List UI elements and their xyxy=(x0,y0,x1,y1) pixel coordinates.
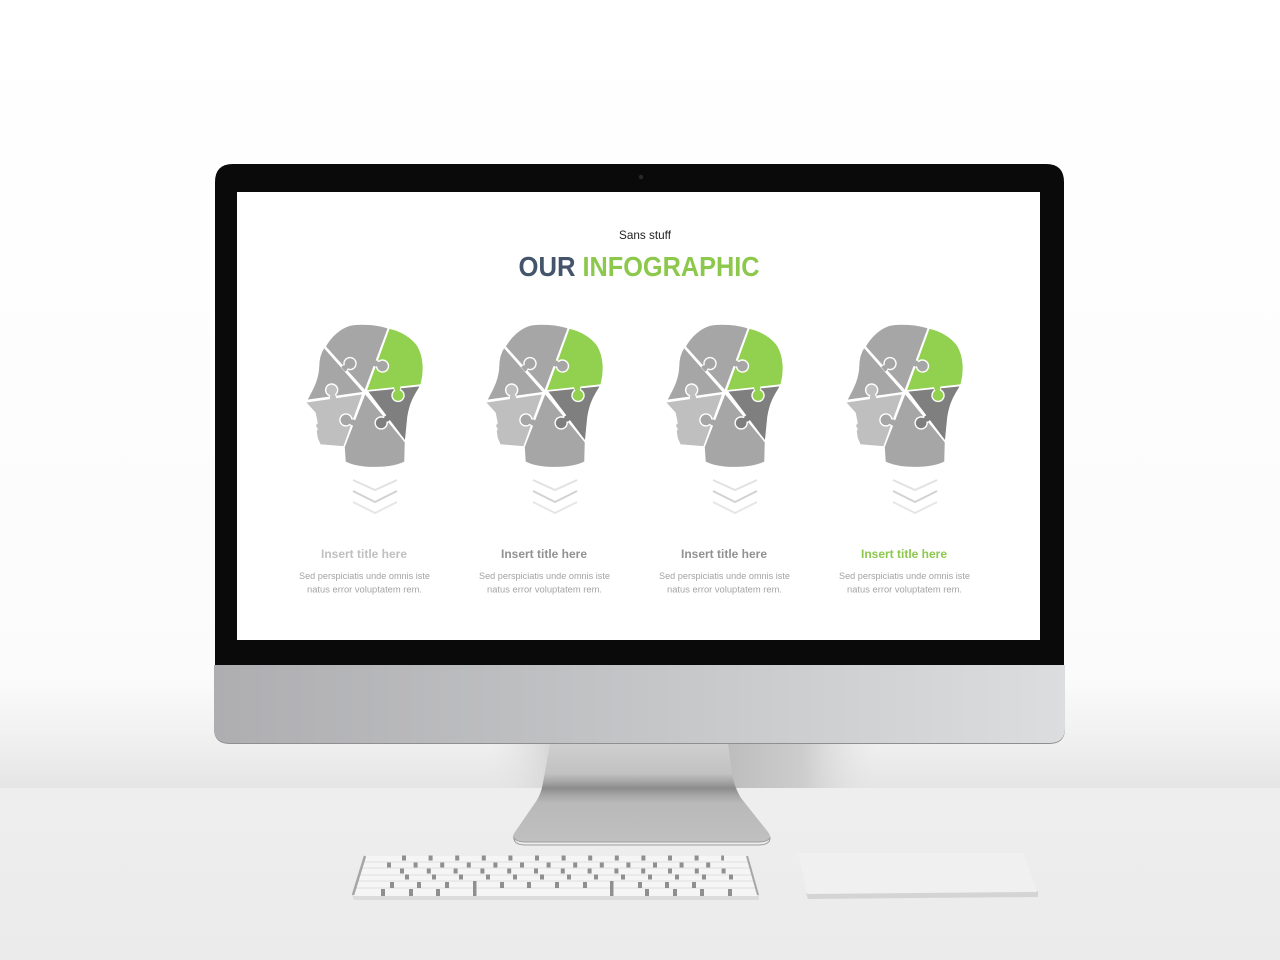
column 2 xyxy=(479,324,610,596)
icon: puzzle head 3 xyxy=(665,324,783,468)
column text 2 xyxy=(479,571,610,596)
keyboard xyxy=(352,856,759,900)
column text 4 xyxy=(839,571,970,596)
column title 1: Insert title here xyxy=(321,547,407,561)
title: OUR xyxy=(518,251,576,282)
monitor stand xyxy=(513,744,770,845)
monitor shadow on wall, right xyxy=(728,744,878,788)
icon: chevrons 2 xyxy=(533,480,577,513)
title xyxy=(518,251,760,282)
title: INFOGRAPHIC xyxy=(582,251,760,282)
subtitle: Sans stuff xyxy=(619,228,672,242)
column text 2: Sed perspiciatis unde omnis iste xyxy=(479,571,610,582)
icon: chevrons 1 xyxy=(353,480,397,513)
screen xyxy=(237,192,1040,640)
monitor chin xyxy=(214,665,1065,744)
icon: puzzle head 1 xyxy=(305,324,423,468)
column text 1: Sed perspiciatis unde omnis iste xyxy=(299,571,430,582)
column text 3: Sed perspiciatis unde omnis iste xyxy=(659,571,790,582)
monitor shadow on wall, left xyxy=(490,744,552,788)
column title 4: Insert title here xyxy=(861,547,947,561)
monitor bezel xyxy=(215,164,1064,665)
icon: chevrons 4 xyxy=(893,480,937,513)
column text 3: natus error voluptatem rem. xyxy=(667,584,782,596)
column title 3: Insert title here xyxy=(681,547,767,561)
icon: puzzle head 4 xyxy=(845,324,963,468)
column text 1: natus error voluptatem rem. xyxy=(307,584,422,596)
column text 2: natus error voluptatem rem. xyxy=(487,584,602,596)
column text 4: natus error voluptatem rem. xyxy=(847,584,962,596)
desk surface xyxy=(0,788,1280,960)
icon: puzzle head 2 xyxy=(485,324,603,468)
column 4 xyxy=(839,324,970,596)
column 1 xyxy=(299,324,430,596)
column text 3 xyxy=(659,571,790,596)
column 3 xyxy=(659,324,790,596)
column text 1 xyxy=(299,571,430,596)
column text 4: Sed perspiciatis unde omnis iste xyxy=(839,571,970,582)
monitor xyxy=(214,164,1065,744)
column title 2: Insert title here xyxy=(501,547,587,561)
icon: chevrons 3 xyxy=(713,480,757,513)
trackpad xyxy=(798,853,1038,899)
webcam xyxy=(639,175,643,179)
